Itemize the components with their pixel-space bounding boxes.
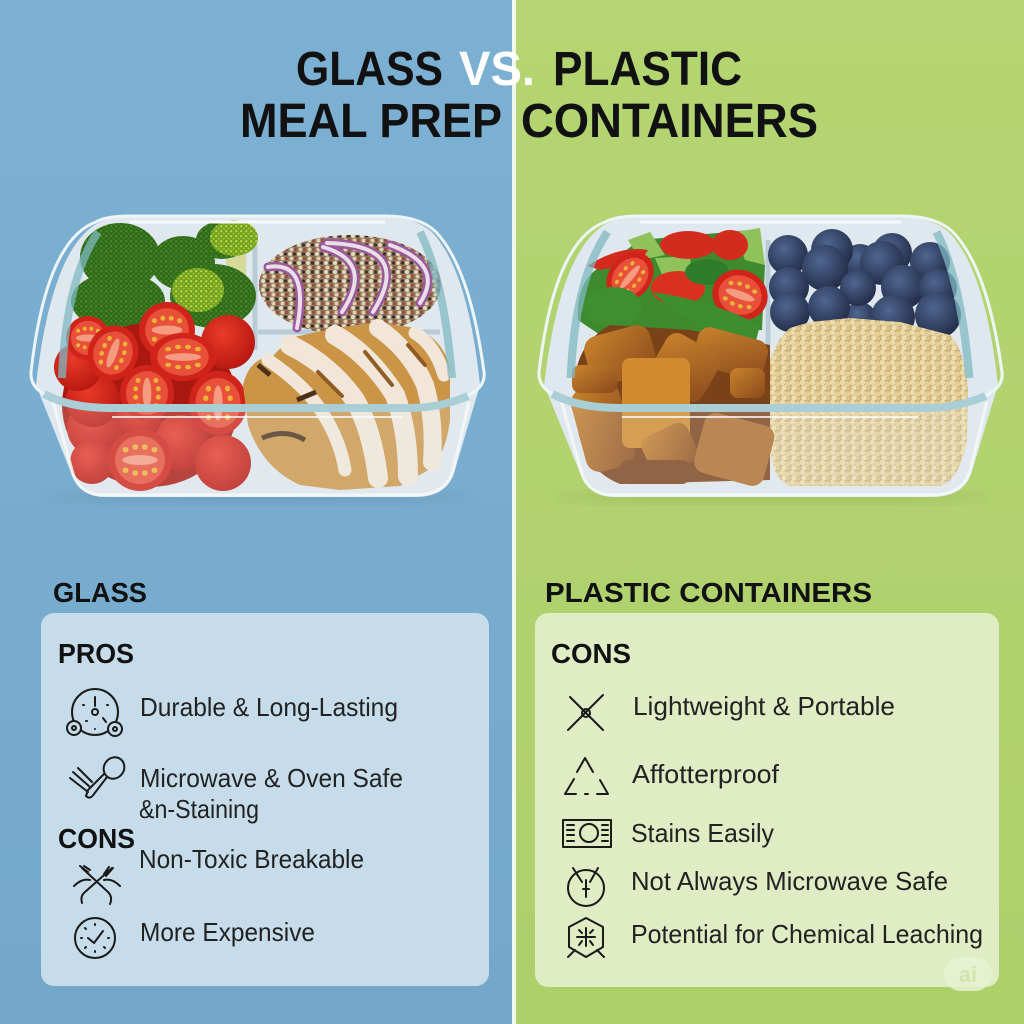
container divider xyxy=(585,240,768,345)
icon: crossed forks xyxy=(74,866,120,904)
panel: plastic cons xyxy=(535,613,999,987)
blueberries xyxy=(768,229,961,339)
panel: glass pros and cons xyxy=(41,613,489,986)
heading: cons: CONS xyxy=(551,638,631,669)
quinoa xyxy=(259,235,441,335)
plastic container with food xyxy=(539,216,1002,504)
center divider xyxy=(512,0,516,1024)
title: PLASTIC xyxy=(553,43,742,96)
icon: hexagon xyxy=(568,918,604,957)
title: MEAL PREP xyxy=(240,95,502,148)
heading: glass: GLASS xyxy=(53,577,147,608)
watermark badge: ai xyxy=(959,962,977,987)
text: affotterproof: Affotterproof xyxy=(632,759,780,789)
icon: microwave xyxy=(563,820,611,847)
crispy tofu xyxy=(568,322,777,489)
icon: dashed triangle xyxy=(565,758,608,794)
text: stains: Stains Easily xyxy=(631,818,774,848)
glass container with food xyxy=(31,216,484,504)
broccoli xyxy=(71,220,258,330)
text: durable: Durable & Long-Lasting xyxy=(140,692,398,722)
sliced chicken xyxy=(243,322,450,490)
icon: fork and spoon xyxy=(70,753,129,798)
text: staining: &n-Staining xyxy=(139,794,259,824)
couscous xyxy=(765,318,968,486)
heading: plastic containers: PLASTIC CONTAINERS xyxy=(545,577,872,608)
icon: crossed tools xyxy=(568,695,603,730)
watermark badge xyxy=(944,957,992,991)
title xyxy=(240,43,818,148)
background: glass side xyxy=(0,0,512,1024)
divider inside container xyxy=(255,245,440,350)
cherry tomatoes xyxy=(54,302,255,491)
icon: timer xyxy=(568,868,604,906)
title: CONTAINERS xyxy=(521,95,818,148)
text: expensive: More Expensive xyxy=(140,917,315,947)
text: lightweight: Lightweight & Portable xyxy=(633,691,895,721)
text: microwave safe: Not Always Microwave Safe xyxy=(631,866,948,896)
text: non-toxic: Non-Toxic Breakable xyxy=(139,844,364,874)
red onion slices xyxy=(268,243,428,328)
heading: cons: CONS xyxy=(58,823,135,854)
text: microwave: Microwave & Oven Safe xyxy=(140,763,403,793)
text: chemical leaching: Potential for Chemical Leaching xyxy=(631,919,983,949)
icon: clock xyxy=(75,918,115,958)
icon: gauge xyxy=(67,689,122,736)
heading: pros: PROS xyxy=(58,638,134,669)
title: GLASS xyxy=(296,43,443,96)
background: plastic side xyxy=(516,0,1024,1024)
salad xyxy=(578,228,775,345)
title: VS. xyxy=(459,43,535,96)
